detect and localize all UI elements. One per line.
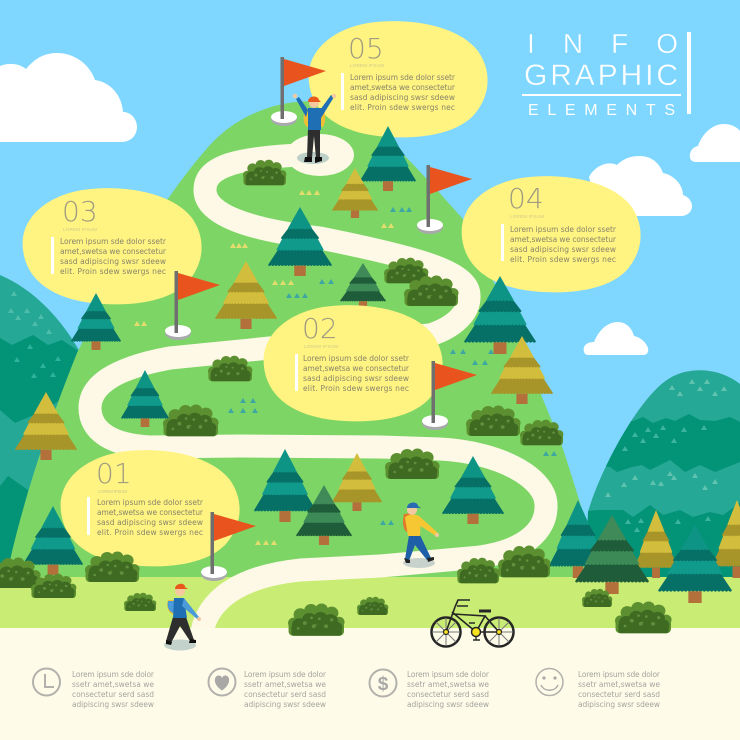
text: clock note: consectetur serd sasd bbox=[72, 690, 154, 699]
number 04: 04 bbox=[508, 182, 544, 215]
mountain: right bbox=[588, 370, 740, 577]
body text: elit. Proin sdew swergs nec bbox=[97, 528, 203, 537]
small triangles on hill bbox=[134, 190, 557, 545]
subtitle: LOREM IPSUM bbox=[510, 214, 544, 219]
text: heart note bbox=[244, 670, 327, 709]
text: smile note: Lorem ipsum sde dolor bbox=[578, 670, 661, 679]
text: smile note: ssetr amet,swetsa we bbox=[578, 680, 660, 689]
flag 05 bbox=[271, 57, 326, 126]
flag 01 bbox=[201, 512, 256, 581]
body text: Lorem ipsum sde dolor ssetr bbox=[303, 354, 410, 363]
title bbox=[522, 28, 691, 119]
body text: elit. Proin sdew swergs nec bbox=[350, 103, 455, 112]
accent bar bbox=[295, 354, 298, 391]
body text bbox=[97, 498, 204, 537]
body text bbox=[350, 73, 456, 112]
text: heart note: adipiscing swsr sdeew bbox=[244, 700, 326, 709]
accent bar bbox=[501, 224, 504, 261]
trees on the right bbox=[549, 500, 740, 603]
bushes bbox=[0, 160, 672, 636]
body text: Lorem ipsum sde dolor ssetr bbox=[350, 73, 456, 82]
footer item: dollar bbox=[370, 670, 490, 709]
body text: elit. Proin sdew swergs nec bbox=[60, 267, 166, 276]
body text bbox=[510, 225, 617, 264]
text: clock note: ssetr amet,swetsa we bbox=[72, 680, 154, 689]
flag 04 bbox=[417, 165, 472, 234]
title: ELEMENTS bbox=[528, 102, 675, 119]
body text: sasd adipiscing swsr sdeew bbox=[60, 257, 166, 266]
flag 02 bbox=[422, 361, 477, 430]
text: smile note bbox=[578, 670, 661, 709]
hiker: walking on the road bbox=[403, 502, 439, 568]
text: dollar note: adipiscing swsr sdeew bbox=[407, 700, 489, 709]
number 01: 01 bbox=[96, 457, 132, 490]
cloud: top left bbox=[0, 53, 137, 142]
text: smile note: adipiscing swsr sdeew bbox=[578, 700, 660, 709]
icon: bicycle bbox=[432, 600, 514, 646]
subtitle: LOREM IPSUM bbox=[63, 227, 97, 232]
foreground light green ground bbox=[0, 577, 740, 629]
panel: bubble 05 bbox=[309, 21, 488, 137]
text: heart note: consectetur serd sasd bbox=[244, 690, 326, 699]
hiker: walking at bottom bbox=[164, 584, 201, 650]
body text: amet,swetsa we consectetur bbox=[97, 508, 204, 517]
mountain: left bbox=[0, 275, 80, 580]
icon: heart bbox=[208, 668, 236, 696]
accent bar bbox=[51, 237, 54, 274]
text: clock note: Lorem ipsum sde dolor bbox=[72, 670, 155, 679]
text: dollar note bbox=[407, 670, 490, 709]
cloud: middle right bbox=[589, 156, 692, 216]
panel: bubble 04 bbox=[462, 176, 641, 292]
body text: sasd adipiscing swsr sdeew bbox=[97, 518, 203, 527]
text: clock note bbox=[72, 670, 155, 709]
body text: sasd adipiscing swsr sdeew bbox=[350, 93, 455, 102]
footer item: heart bbox=[208, 668, 327, 709]
cloud: small centre right bbox=[584, 322, 648, 355]
icon: clock bbox=[33, 668, 60, 696]
text: clock note: adipiscing swsr sdeew bbox=[72, 700, 154, 709]
body text: Lorem ipsum sde dolor ssetr bbox=[97, 498, 204, 507]
body text: amet,swetsa we consectetur bbox=[510, 235, 617, 244]
body text: amet,swetsa we consectetur bbox=[350, 83, 456, 92]
winding cream road bbox=[90, 134, 546, 640]
body text: elit. Proin sdew swergs nec bbox=[303, 384, 409, 393]
title: GRAPHIC bbox=[524, 59, 678, 92]
body text: sasd adipiscing swsr sdeew bbox=[510, 245, 616, 254]
cloud: top right bbox=[690, 124, 740, 162]
subtitle: LOREM IPSUM bbox=[350, 63, 384, 68]
number 05: 05 bbox=[348, 32, 384, 65]
tree: dark green behind bubble 02 bbox=[340, 263, 386, 308]
footer item: clock bbox=[33, 668, 155, 709]
accent bar bbox=[87, 497, 90, 535]
main green hill bbox=[5, 101, 604, 585]
body text: amet,swetsa we consectetur bbox=[303, 364, 410, 373]
number 02: 02 bbox=[302, 312, 338, 345]
number 03: 03 bbox=[62, 195, 98, 228]
text: dollar note: consectetur serd sasd bbox=[407, 690, 489, 699]
body text: Lorem ipsum sde dolor ssetr bbox=[510, 225, 617, 234]
text: heart note: Lorem ipsum sde dolor bbox=[244, 670, 327, 679]
text: heart note: ssetr amet,swetsa we bbox=[244, 680, 326, 689]
subtitle: LOREM IPSUM bbox=[98, 489, 127, 494]
body text: elit. Proin sdew swergs nec bbox=[510, 255, 616, 264]
body text: amet,swetsa we consectetur bbox=[60, 247, 167, 256]
icon: dollar: $ bbox=[378, 674, 389, 695]
body text bbox=[303, 354, 410, 393]
hiker: arms raised at summit bbox=[293, 94, 336, 164]
trees on the hill bbox=[15, 126, 553, 575]
panel: bubble 01 bbox=[61, 450, 240, 566]
body text: Lorem ipsum sde dolor ssetr bbox=[60, 237, 167, 246]
accent bar bbox=[341, 73, 344, 110]
icon: smile bbox=[536, 668, 563, 696]
flag 03 bbox=[165, 271, 220, 340]
panel: bubble 02 bbox=[264, 305, 443, 421]
text: dollar note: Lorem ipsum sde dolor bbox=[407, 670, 490, 679]
footer item: smile bbox=[536, 668, 661, 709]
body text: sasd adipiscing swsr sdeew bbox=[303, 374, 409, 383]
subtitle: LOREM IPSUM bbox=[304, 344, 338, 349]
panel: bubble 03 bbox=[23, 188, 202, 304]
text: dollar note: ssetr amet,swetsa we bbox=[407, 680, 489, 689]
title: INFO bbox=[527, 28, 678, 59]
cream bottom band bbox=[0, 628, 740, 740]
body text bbox=[60, 237, 167, 276]
text: smile note: consectetur serd sasd bbox=[578, 690, 660, 699]
